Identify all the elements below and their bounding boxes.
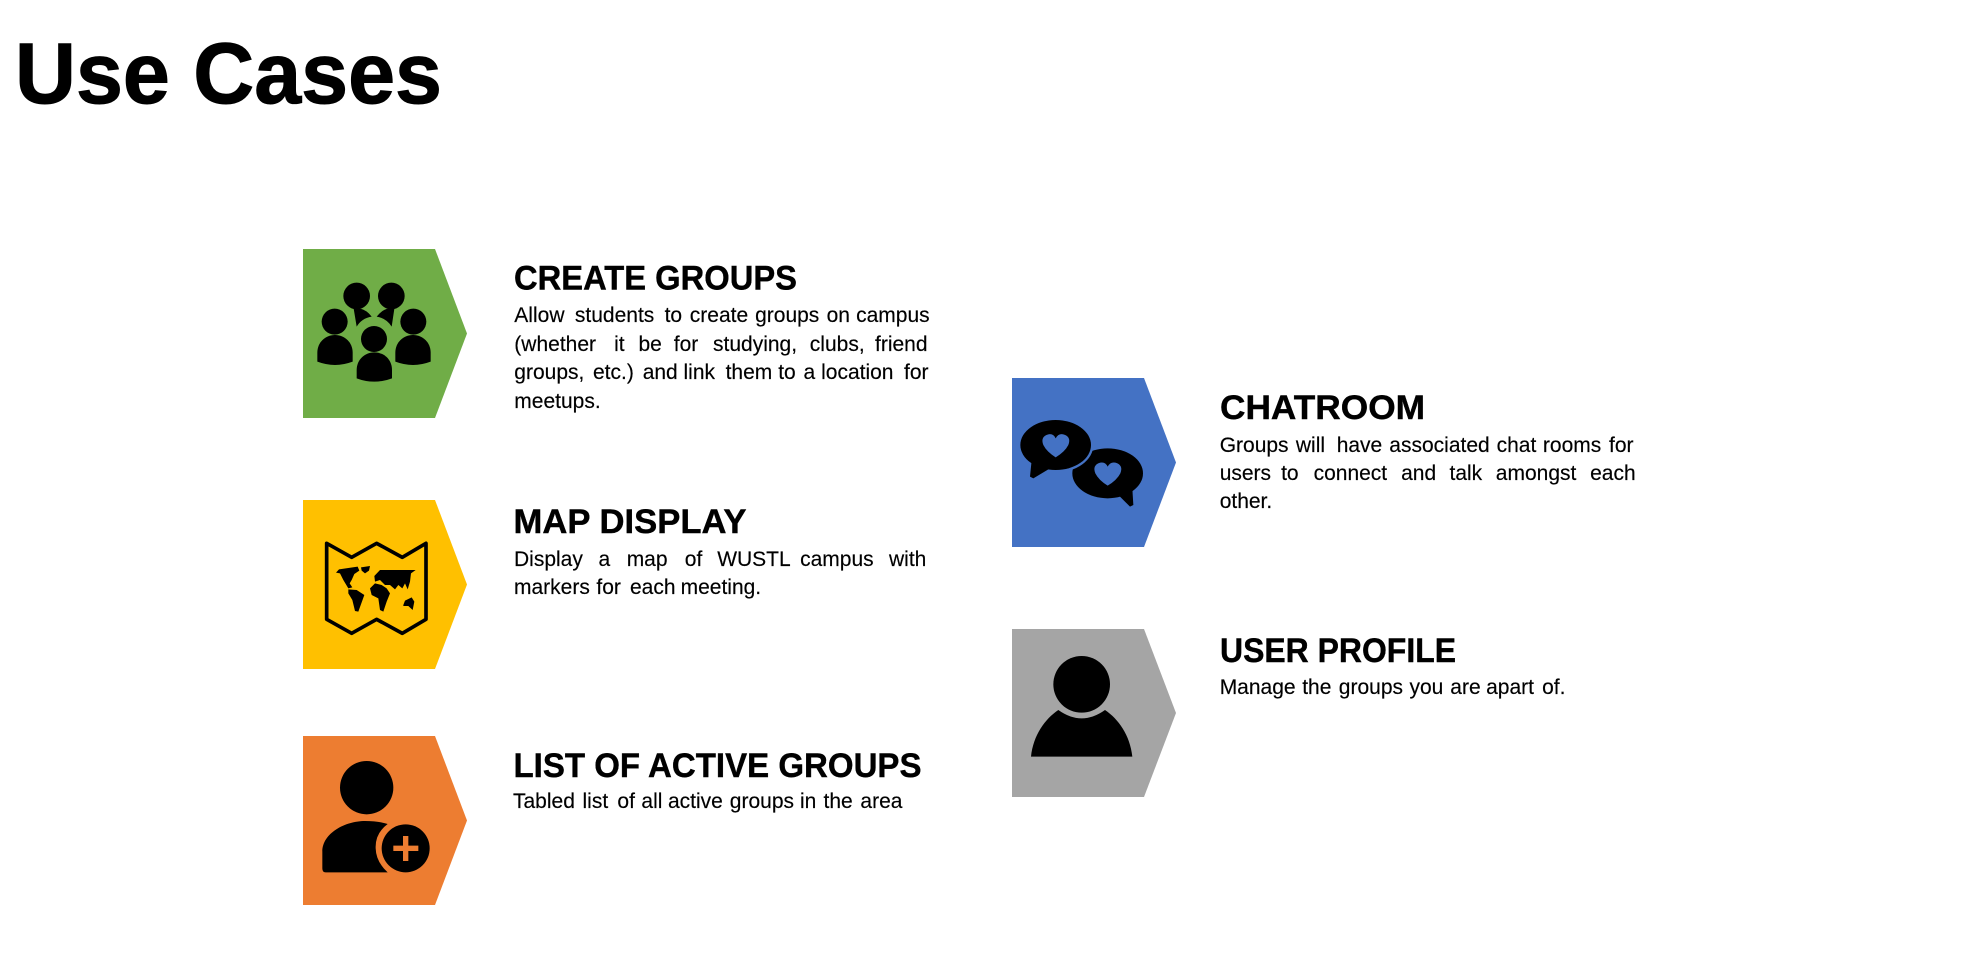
description: user profile: groups bbox=[1339, 676, 1403, 699]
heading: chatroom: CHATROOM bbox=[1220, 389, 1425, 427]
description: list of active groups: Tabled bbox=[513, 790, 575, 813]
panel: map display bbox=[303, 500, 926, 669]
icon: user bbox=[1031, 656, 1132, 757]
blue chevron bbox=[1012, 378, 1176, 547]
description: create groups: meetups. bbox=[514, 390, 601, 413]
description: chatroom: and bbox=[1401, 462, 1436, 485]
description: chatroom: Groups bbox=[1220, 434, 1289, 457]
heading: user profile: USER PROFILE bbox=[1220, 632, 1456, 670]
description: create groups: studying, bbox=[713, 333, 797, 356]
description: create groups: and bbox=[643, 361, 678, 384]
description: create groups: etc.) bbox=[593, 361, 634, 384]
description: user profile: are bbox=[1450, 676, 1481, 699]
description: create groups: to bbox=[778, 361, 796, 384]
description: map display: each bbox=[630, 576, 676, 599]
description: list of active groups: groups bbox=[730, 790, 794, 813]
panel: chatroom bbox=[1012, 378, 1636, 547]
panel: user profile bbox=[1012, 629, 1565, 797]
description: create groups: link bbox=[684, 361, 716, 384]
icon: add user bbox=[322, 761, 430, 872]
panel: list of active groups bbox=[303, 736, 922, 905]
panel: create groups bbox=[303, 249, 930, 418]
description: chatroom: associated bbox=[1389, 434, 1490, 457]
description: chatroom: amongst bbox=[1496, 462, 1577, 485]
description: create groups: for bbox=[904, 361, 929, 384]
description: chatroom: rooms bbox=[1543, 434, 1601, 457]
description: map display: map bbox=[627, 548, 668, 571]
description: create groups: to bbox=[665, 304, 682, 327]
description: map display: for bbox=[596, 576, 621, 599]
description: chatroom bbox=[1220, 434, 1636, 513]
description: create groups: students bbox=[575, 304, 654, 327]
title: Use Cases bbox=[15, 26, 442, 122]
description: create groups: Allow bbox=[514, 304, 565, 327]
icon: chat bubbles with hearts bbox=[1018, 418, 1143, 507]
description: map display bbox=[514, 548, 926, 599]
yellow chevron bbox=[303, 500, 467, 669]
description: list of active groups: active bbox=[668, 790, 723, 813]
description: chatroom: each bbox=[1590, 462, 1636, 485]
heading: map display: MAP DISPLAY bbox=[514, 503, 747, 541]
description: list of active groups: area bbox=[860, 790, 903, 813]
gray chevron bbox=[1012, 629, 1176, 797]
description: user profile: Manage bbox=[1220, 676, 1296, 699]
green chevron bbox=[303, 249, 467, 418]
description: user profile: apart bbox=[1486, 676, 1534, 699]
description: create groups: them bbox=[726, 361, 772, 384]
description: map display: meeting. bbox=[681, 576, 761, 599]
description: chatroom: users bbox=[1220, 462, 1271, 485]
description: list of active groups: in bbox=[800, 790, 816, 813]
description: user profile: you bbox=[1410, 676, 1443, 699]
description: map display: campus bbox=[800, 548, 874, 571]
heading: create groups: CREATE GROUPS bbox=[514, 260, 797, 298]
icon: group of people bbox=[317, 283, 431, 382]
heading: list of active groups: LIST OF ACTIVE GROUPS bbox=[514, 747, 922, 785]
description: create groups: groups bbox=[755, 304, 819, 327]
description: list of active groups: all bbox=[641, 790, 662, 813]
description: user profile: the bbox=[1302, 676, 1331, 699]
orange chevron bbox=[303, 736, 467, 905]
description: create groups: location bbox=[821, 361, 893, 384]
description: map display: markers bbox=[514, 576, 590, 599]
description: chatroom: other. bbox=[1220, 490, 1272, 513]
description: create groups: it bbox=[614, 333, 625, 356]
description: create groups: (whether bbox=[514, 333, 596, 356]
description: map display: a bbox=[598, 548, 610, 571]
description: create groups: for bbox=[674, 333, 698, 356]
description: chatroom: connect bbox=[1314, 462, 1387, 485]
description: user profile: of. bbox=[1542, 676, 1565, 699]
description: create groups bbox=[514, 304, 930, 413]
description: create groups: create bbox=[690, 304, 748, 327]
description: chatroom: talk bbox=[1450, 462, 1483, 485]
description: list of active groups: the bbox=[824, 790, 853, 813]
description: list of active groups: of bbox=[617, 790, 635, 813]
description: create groups: groups, bbox=[514, 361, 584, 384]
icon: world map bbox=[327, 543, 426, 633]
description: create groups: campus bbox=[856, 304, 930, 327]
description: chatroom: will bbox=[1295, 434, 1325, 457]
description: chatroom: for bbox=[1609, 434, 1634, 457]
description: map display: Display bbox=[514, 548, 583, 571]
description: create groups: a bbox=[804, 361, 816, 384]
description: map display: WUSTL bbox=[717, 548, 790, 571]
description: chatroom: chat bbox=[1497, 434, 1536, 457]
description: chatroom: have bbox=[1337, 434, 1382, 457]
description: create groups: friend bbox=[875, 333, 928, 356]
description: map display: of bbox=[685, 548, 702, 571]
description: create groups: clubs, bbox=[810, 333, 865, 356]
description: create groups: be bbox=[638, 333, 662, 356]
description: create groups: on bbox=[827, 304, 850, 327]
description: map display: with bbox=[888, 548, 926, 571]
description: chatroom: to bbox=[1281, 462, 1299, 485]
description: list of active groups: list bbox=[582, 790, 608, 813]
